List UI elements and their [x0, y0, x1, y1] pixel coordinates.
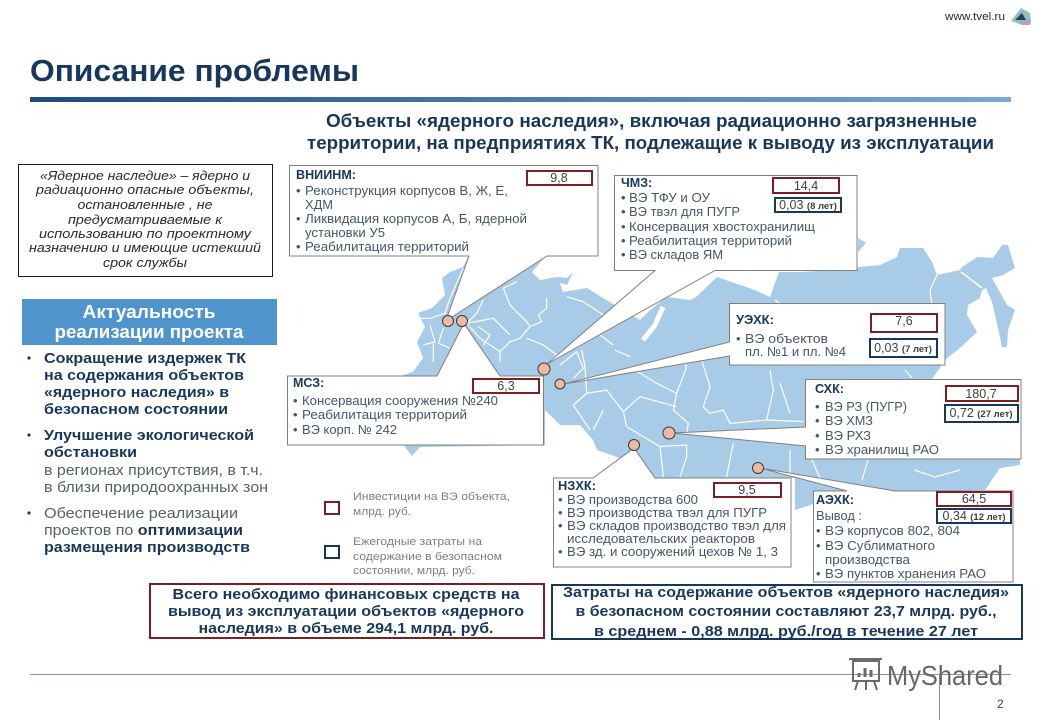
callout: СХК: СХК:: [815, 382, 844, 396]
callout: ВНИИНМ: •: [296, 239, 301, 254]
callout: ЧМЗ: •: [621, 233, 626, 248]
east regional borders: [775, 275, 960, 480]
callout: АЭХК: •: [816, 523, 821, 538]
definition box: «Ядерное наследие» – ядерно и: [40, 168, 250, 183]
callout: МСЗ: Консервация сооружения №240: [302, 393, 498, 408]
value: 9,5: [714, 483, 781, 497]
value: 6,3: [473, 379, 539, 393]
value: 9,8: [527, 171, 592, 185]
watermark: MyShared: MyShared: [887, 660, 1003, 691]
relevance bullet list: обстановки: [44, 444, 137, 461]
callout: МСЗ: МСЗ:: [293, 376, 324, 390]
callout: ВНИИНМ: •: [296, 183, 301, 198]
callout: ЧМЗ: [547, 176, 857, 364]
callout: ВНИИНМ: ХДМ: [305, 197, 333, 212]
callout: ЧМЗ: •: [621, 219, 626, 234]
value: 7,6: 7,6: [895, 314, 913, 328]
callout: НЗХК: •: [558, 518, 563, 533]
callout: СХК: ВЭ РХЗ: [825, 428, 871, 443]
callout: НЗХК: ВЭ зд. и сооружений цехов № 1, 3: [567, 544, 778, 559]
watermark: MyShared: [849, 659, 1003, 691]
callout: АЭХК: Вывод :: [816, 508, 862, 523]
callout: ВНИИНМ: Реабилитация территорий: [305, 239, 469, 254]
value: 0,72 (27 лет): 0,72 (27 лет): [949, 406, 1013, 420]
definition box: срок службы: [103, 255, 187, 270]
callout: ВНИИНМ: Ликвидация корпусов А, Б, ядерной: [305, 211, 527, 226]
value: 0,03 (7 лет): [870, 339, 937, 357]
callout: НЗХК: ВЭ производства 600: [567, 492, 698, 507]
callout: НЗХК: ВЭ складов производство твэл для: [567, 518, 786, 533]
value: 0,03 (8 лет): 0,03 (8 лет): [779, 198, 837, 212]
definition box: радиационно опасные объекты,: [35, 182, 254, 197]
value: 7,6: [871, 314, 937, 332]
legend: Ежегодные затраты на: [353, 536, 483, 548]
callout: АЭХК: •: [816, 538, 821, 553]
value: 9,8: 9,8: [550, 171, 568, 185]
callout: АЭХК: •: [816, 566, 821, 581]
relevance bullet list: [27, 350, 268, 556]
relevance bullet list: на содержания объектов: [44, 367, 244, 384]
callout: total financing: Всего необходимо финансовых средств на: [172, 586, 520, 603]
legend: состоянии, млрд. руб.: [353, 565, 475, 577]
callout: maintenance costs: Затраты на содержание объектов «ядерного наследия»: [563, 584, 1009, 601]
value: 180,7: 180,7: [965, 387, 997, 401]
callout: НЗХК: исследовательских реакторов: [567, 531, 755, 546]
relevance bullet list: размещения производств: [44, 539, 250, 556]
west regional borders: [420, 268, 613, 378]
callout: АЭХК: АЭХК:: [816, 493, 854, 507]
callout: УЭХК: •: [736, 331, 741, 346]
subtitle: территории, на предприятиях ТК, подлежащие к выводу из эксплуатации: [307, 133, 994, 153]
legend: [325, 491, 510, 577]
value: 0,03 (7 лет): 0,03 (7 лет): [874, 341, 932, 355]
value: 14,4: [773, 178, 839, 193]
value: 9,5: 9,5: [738, 483, 756, 497]
callout: МСЗ: Реабилитация территорий: [302, 407, 467, 422]
panel: project relevance heading: [22, 299, 277, 345]
legend: содержание в безопасном: [353, 551, 502, 563]
callout: ВНИИНМ: установки У5: [305, 225, 385, 240]
website address: www.tvel.ru: [944, 11, 1005, 23]
site markers on map: [442, 316, 764, 474]
callout: СХК: ВЭ РЗ (ПУГР): [825, 399, 907, 414]
callout: СХК: •: [815, 442, 820, 457]
callout: ВНИИНМ: [290, 166, 598, 320]
callout: НЗХК: •: [558, 492, 563, 507]
value: 64,5: [937, 492, 1011, 506]
relevance bullet list: безопасном состоянии: [44, 401, 228, 418]
callout: ЧМЗ: ВЭ складов ЯМ: [629, 247, 723, 262]
callout: УЭХК: [564, 304, 945, 384]
callout: МСЗ: ВЭ корп. № 242: [302, 422, 397, 437]
callout: ЧМЗ: Консервация хвостохранилищ: [629, 219, 815, 234]
title rule: [30, 97, 1011, 102]
callout: maintenance costs: [552, 584, 1022, 640]
callout: ЧМЗ: ЧМЗ:: [621, 176, 652, 190]
panel: project relevance heading: Актуальность: [82, 302, 216, 322]
callout: maintenance costs: в среднем - 0,88 млрд. руб./год в течение 27 лет: [594, 623, 978, 640]
callout: МСЗ: [288, 325, 544, 445]
callout: АЭХК: ВЭ корпусов 802, 804: [825, 523, 960, 538]
callout: НЗХК: ВЭ производства твэл для ПУГР: [567, 505, 767, 520]
callout: ЧМЗ: •: [621, 247, 626, 262]
value: 14,4: 14,4: [794, 179, 818, 193]
callout: МСЗ: •: [293, 393, 298, 408]
callout: АЭХК: [760, 468, 1013, 582]
callout: ЧМЗ: ВЭ твэл для ПУГР: [629, 204, 740, 219]
definition box: остановленные , не: [78, 197, 212, 212]
callout: НЗХК: НЗХК:: [558, 479, 596, 493]
callout: СХК: [672, 380, 1021, 459]
callout: АЭХК: производства: [825, 552, 911, 567]
definition box: [18, 164, 272, 276]
callout: СХК: •: [815, 428, 820, 443]
callout: ВНИИНМ: Реконструкция корпусов В, Ж, Е,: [305, 183, 508, 198]
footer rule: [30, 674, 1011, 720]
relevance bullet list: «ядерного наследия» в: [44, 384, 229, 401]
callout: total financing: наследия» в объеме 294,1 млрд. руб.: [198, 620, 494, 637]
central regional borders: [573, 350, 803, 477]
page number: 2: [997, 697, 1004, 711]
value: 0,34 (12 лет): 0,34 (12 лет): [942, 509, 1006, 523]
callout: ЧМЗ: •: [621, 204, 626, 219]
legend: млрд. руб.: [353, 506, 411, 518]
subtitle: Объекты «ядерного наследия», включая радиационно загрязненные: [326, 111, 977, 131]
relevance bullet list: Обеспечение реализации: [44, 505, 238, 522]
callout: УЭХК: пл. №1 и пл. №4: [745, 344, 846, 359]
callout: МСЗ: •: [293, 407, 298, 422]
callout: total financing: [150, 584, 544, 638]
definition box: назначению и имеющие истекший: [29, 240, 261, 255]
map of Russia: [403, 238, 1021, 510]
callout: total financing: вывод из эксплуатации объектов «ядерного: [168, 603, 524, 620]
definition box: использованию по проектному: [39, 226, 253, 241]
callout: СХК: ВЭ ХМЗ: [825, 413, 873, 428]
legend: Инвестиции на ВЭ объекта,: [353, 491, 510, 503]
definition box: предусматриваемые к: [68, 212, 223, 227]
relevance bullet list: в регионах присутствия, в т.ч.: [44, 462, 263, 479]
callout: maintenance costs: в безопасном состоянии составляют 23,7 млрд. руб.,: [576, 603, 996, 620]
value: 64,5: 64,5: [962, 492, 986, 506]
callout: ВНИИНМ: ВНИИНМ:: [296, 168, 356, 182]
callout: МСЗ: •: [293, 422, 298, 437]
callout: ЧМЗ: Реабилитация территорий: [629, 233, 792, 248]
value: 6,3: 6,3: [497, 379, 515, 393]
title: Описание проблемы: [30, 53, 359, 88]
callout: УЭХК: ВЭ объектов: [745, 331, 828, 346]
relevance bullet list: Сокращение издержек ТК: [44, 350, 247, 367]
relevance bullet list: Улучшение экологической: [44, 427, 254, 444]
callout: НЗХК: [554, 448, 791, 567]
value: 180,7: [946, 386, 1018, 401]
callout: НЗХК: •: [558, 544, 563, 559]
callout: НЗХК: •: [558, 505, 563, 520]
callout: УЭХК: УЭХК:: [736, 313, 774, 327]
callout: СХК: •: [815, 413, 820, 428]
subtitle: [307, 111, 994, 153]
callout: ВНИИНМ: •: [296, 211, 301, 226]
icon: TVEL logo: [1011, 8, 1031, 25]
relevance bullet list: проектов по оптимизации: [44, 522, 243, 539]
relevance bullet list: в близи природоохранных зон: [44, 479, 268, 496]
callout: СХК: ВЭ хранилищ РАО: [825, 442, 939, 457]
callout: АЭХК: ВЭ пунктов хранения РАО: [825, 566, 986, 581]
callout: ЧМЗ: •: [621, 190, 626, 205]
callout: АЭХК: ВЭ Сублиматного: [825, 538, 935, 553]
panel: project relevance heading: реализации проекта: [54, 322, 245, 342]
callout: СХК: •: [815, 399, 820, 414]
callout: ЧМЗ: ВЭ ТФУ и ОУ: [629, 190, 711, 205]
